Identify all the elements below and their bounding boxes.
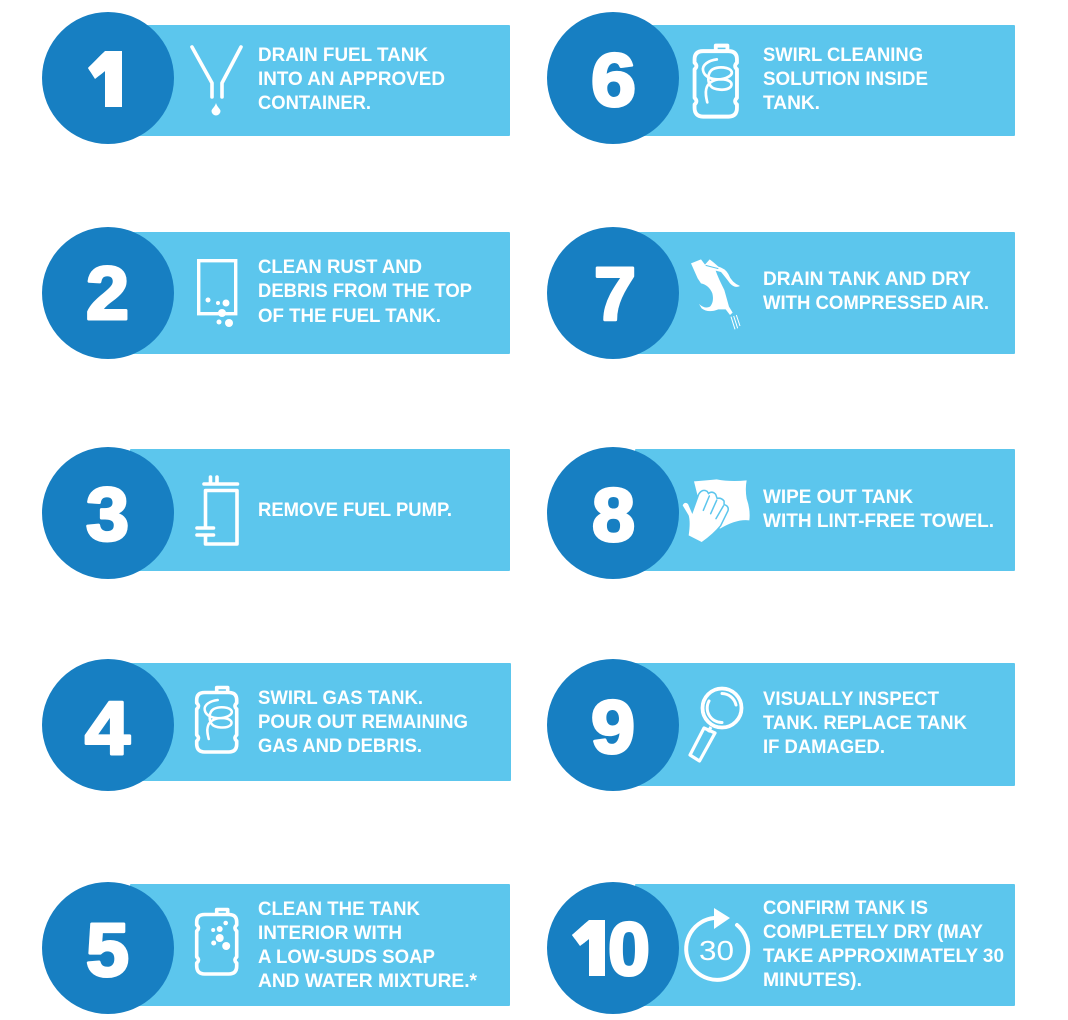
- step 8 text: [763, 486, 994, 532]
- step 3 bar: [130, 449, 510, 571]
- step 4 text: GAS AND DEBRIS.: [258, 735, 422, 757]
- icon: bottle with bubbles: [197, 910, 237, 974]
- icon: bottle with swirl: [695, 46, 737, 117]
- icon: air blow gun: [691, 259, 740, 329]
- step 5 text: AND WATER MIXTURE.*: [258, 970, 477, 992]
- step 4 number badge: [42, 659, 174, 791]
- panel: step 8: [547, 447, 1015, 579]
- step 5 number badge: [42, 882, 174, 1014]
- step 4 text: POUR OUT REMAINING: [258, 711, 468, 733]
- icon: 30 minute timer: 30: [699, 935, 734, 966]
- step 2 text: DEBRIS FROM THE TOP: [258, 280, 472, 302]
- panel: step 3: [42, 447, 510, 579]
- step 2 number badge: [42, 227, 174, 359]
- step 10 number badge: [547, 882, 679, 1014]
- step 6 text: [763, 44, 928, 114]
- step 10 text: TAKE APPROXIMATELY 30: [763, 945, 1004, 967]
- icon: funnel with drop: [192, 47, 241, 116]
- step 7 text: [763, 268, 989, 314]
- step 1 text: [258, 44, 445, 114]
- step 4 text: SWIRL GAS TANK.: [258, 687, 423, 709]
- step 6 text: SOLUTION INSIDE: [763, 68, 928, 90]
- step 2 number badge: 2: [86, 251, 129, 335]
- step 3 number badge: 3: [86, 472, 129, 556]
- icon: magnifying glass: [690, 688, 742, 761]
- step 8 text: WIPE OUT TANK: [763, 486, 913, 508]
- step 10 text: COMPLETELY DRY (MAY: [763, 921, 983, 943]
- step 2 bar: [130, 232, 510, 354]
- step 9 number badge: 9: [591, 685, 635, 769]
- step 4 number badge: 4: [85, 686, 130, 770]
- step 6 bar: [635, 25, 1015, 136]
- panel: step 9: [547, 659, 1015, 791]
- panel: step 6: [547, 12, 1015, 144]
- step 1 number badge: 1: [84, 38, 124, 122]
- panel: step 10: [547, 882, 1015, 1014]
- step 10 number badge: 10: [566, 907, 650, 991]
- step 5 text: A LOW-SUDS SOAP: [258, 946, 435, 968]
- step 10 bar: [635, 884, 1015, 1006]
- icon: fuel pump: [197, 477, 238, 544]
- step 9 text: VISUALLY INSPECT: [763, 688, 939, 710]
- step 9 text: [763, 688, 967, 758]
- icon: 30 minute timer: [686, 908, 748, 980]
- step 1 bar: [130, 25, 510, 136]
- panel: step 4: [42, 659, 511, 791]
- panel: step 2: [42, 227, 510, 359]
- step 2 text: [258, 256, 472, 327]
- step 7 text: DRAIN TANK AND DRY: [763, 268, 971, 290]
- step 1 text: CONTAINER.: [258, 92, 371, 114]
- panel: step 7: [547, 227, 1015, 359]
- step 9 bar: [635, 663, 1015, 786]
- panel: step 5: [42, 882, 510, 1014]
- icon: hand wiping with towel: [683, 479, 750, 542]
- step 9 text: IF DAMAGED.: [763, 736, 885, 758]
- step 3 number badge: [42, 447, 174, 579]
- step 10 text: MINUTES).: [763, 969, 862, 991]
- step 8 number badge: [547, 447, 679, 579]
- step 6 number badge: 6: [591, 38, 636, 122]
- step 5 number badge: 5: [86, 908, 129, 992]
- step 1 text: INTO AN APPROVED: [258, 68, 445, 90]
- step 7 text: WITH COMPRESSED AIR.: [763, 292, 989, 314]
- step 4 bar: [130, 663, 511, 781]
- step 4 text: [258, 687, 468, 757]
- step 5 bar: [130, 884, 510, 1006]
- step 6 text: SWIRL CLEANING: [763, 44, 923, 66]
- panel: step 1: [42, 12, 510, 144]
- icon: tank with debris: [199, 261, 236, 327]
- step 5 text: CLEAN THE TANK: [258, 898, 420, 920]
- step 8 number badge: 8: [592, 473, 635, 557]
- step 7 number badge: 7: [594, 252, 636, 336]
- step 6 text: TANK.: [763, 92, 820, 114]
- step 10 text: CONFIRM TANK IS: [763, 897, 928, 919]
- step 3 text: REMOVE FUEL PUMP.: [258, 499, 452, 521]
- step 8 bar: [635, 449, 1015, 571]
- step 1 number badge: [42, 12, 174, 144]
- step 9 text: TANK. REPLACE TANK: [763, 712, 967, 734]
- step 7 bar: [635, 232, 1015, 354]
- step 2 text: OF THE FUEL TANK.: [258, 305, 441, 327]
- step 1 text: DRAIN FUEL TANK: [258, 44, 428, 66]
- step 10 text: [763, 897, 1004, 991]
- step 5 text: INTERIOR WITH: [258, 922, 402, 944]
- step 8 text: WITH LINT-FREE TOWEL.: [763, 510, 994, 532]
- step 9 number badge: [547, 659, 679, 791]
- step 2 text: CLEAN RUST AND: [258, 256, 422, 278]
- step 6 number badge: [547, 12, 679, 144]
- icon: bottle with swirl: [197, 688, 237, 752]
- step 5 text: [258, 898, 477, 992]
- step 7 number badge: [547, 227, 679, 359]
